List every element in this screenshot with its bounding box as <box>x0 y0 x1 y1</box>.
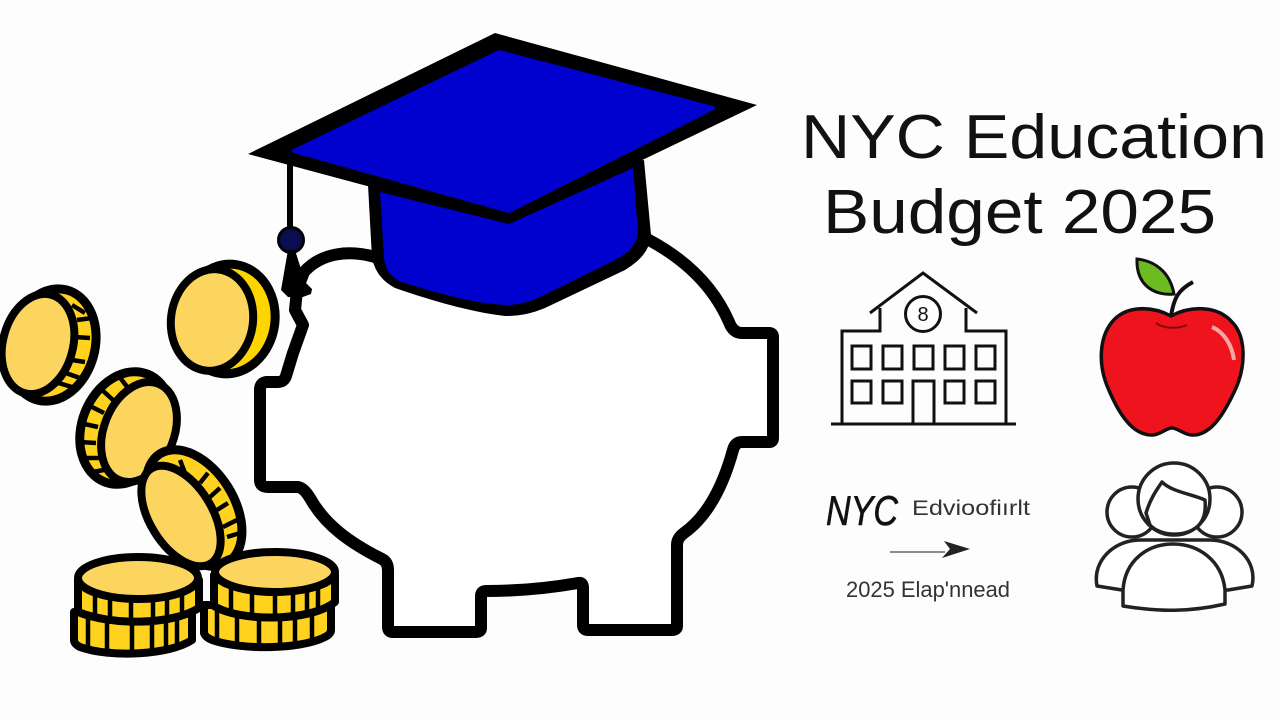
graduation cap <box>248 33 757 316</box>
secondary logo text: Edvioofiırlt <box>912 497 1030 520</box>
dimple <box>1156 323 1187 328</box>
icon: school building: 8 <box>917 304 929 326</box>
falling and stacked coins <box>0 258 335 654</box>
leaf <box>1137 259 1174 294</box>
secondary logo text: NYC <box>826 487 899 534</box>
icon: school building <box>831 273 1016 424</box>
secondary logo text <box>826 487 1030 602</box>
right stack <box>204 552 335 647</box>
stem <box>1171 282 1193 316</box>
title: NYC Education <box>801 103 1267 172</box>
icon: red apple <box>1101 259 1243 435</box>
highlight <box>1212 327 1234 360</box>
piggy bank outline <box>260 240 773 632</box>
coin bottom middle <box>125 433 262 583</box>
tassel <box>278 160 312 298</box>
coin top left <box>0 279 108 411</box>
coin middle <box>63 358 191 498</box>
coin top right <box>164 258 282 380</box>
left stack <box>74 557 199 654</box>
title: Budget 2025 <box>823 178 1216 247</box>
icon: group of people <box>1096 463 1253 610</box>
cap base <box>368 160 651 316</box>
apple body <box>1101 309 1243 435</box>
secondary logo text: 2025 Elap'nnead <box>846 577 1010 602</box>
cap board <box>248 33 757 224</box>
arrow <box>890 541 970 558</box>
title <box>801 103 1267 247</box>
